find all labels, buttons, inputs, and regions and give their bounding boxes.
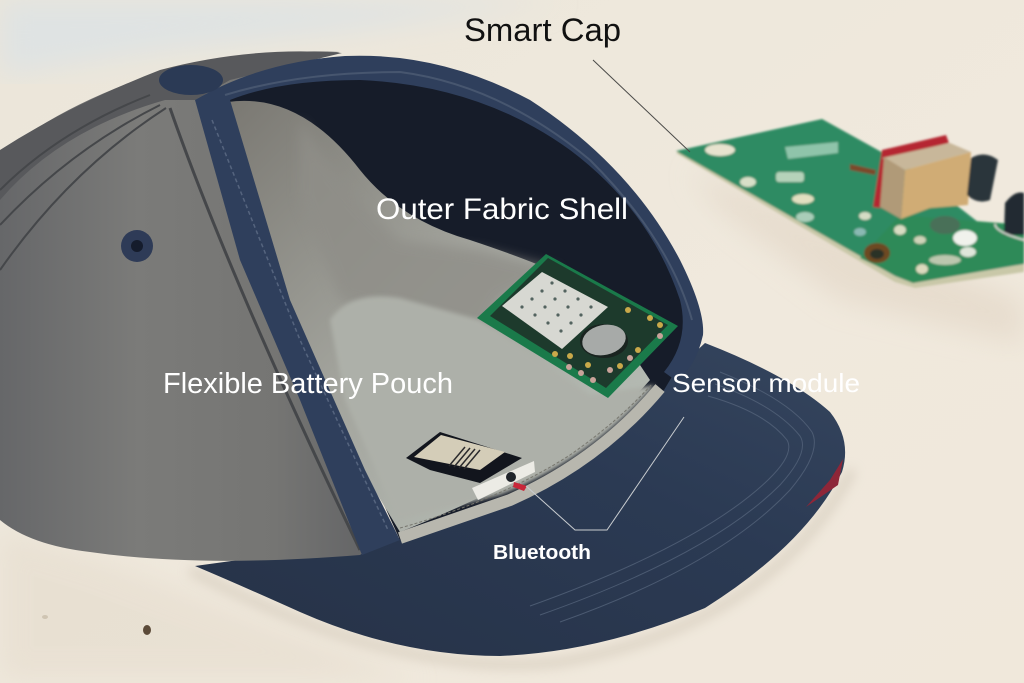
panel seams (0, 95, 360, 550)
label: Flexible Battery Pouch: Flexible Battery Pouch (163, 368, 453, 400)
brim stitching (530, 372, 814, 622)
circuit board in background (676, 119, 1024, 288)
eyelet (121, 230, 153, 262)
cap brim (195, 343, 845, 656)
inner dark lining (205, 68, 700, 540)
bluetooth chip (406, 432, 535, 500)
label: Sensor module: Sensor module (672, 368, 860, 398)
crown button (159, 65, 223, 95)
title: Smart Cap: Smart Cap (464, 12, 621, 48)
inner gray lining (228, 101, 650, 532)
sensor module board (477, 254, 678, 398)
capacitors and components (854, 154, 1024, 274)
leader line: Smart Cap (593, 60, 690, 152)
navy edge band around opening (195, 56, 703, 555)
brim red tag (806, 459, 843, 507)
label: Outer Fabric Shell: Outer Fabric Shell (376, 193, 628, 226)
gray crown panel (0, 51, 395, 561)
label: Bluetooth: Bluetooth (493, 542, 591, 564)
cap (0, 51, 852, 665)
lining stitched edge (400, 388, 660, 538)
large wooden capacitor (850, 135, 971, 219)
leader line: Bluetooth to Sensor module (526, 417, 684, 530)
lining floor (330, 296, 655, 520)
cap shadow (190, 470, 852, 665)
